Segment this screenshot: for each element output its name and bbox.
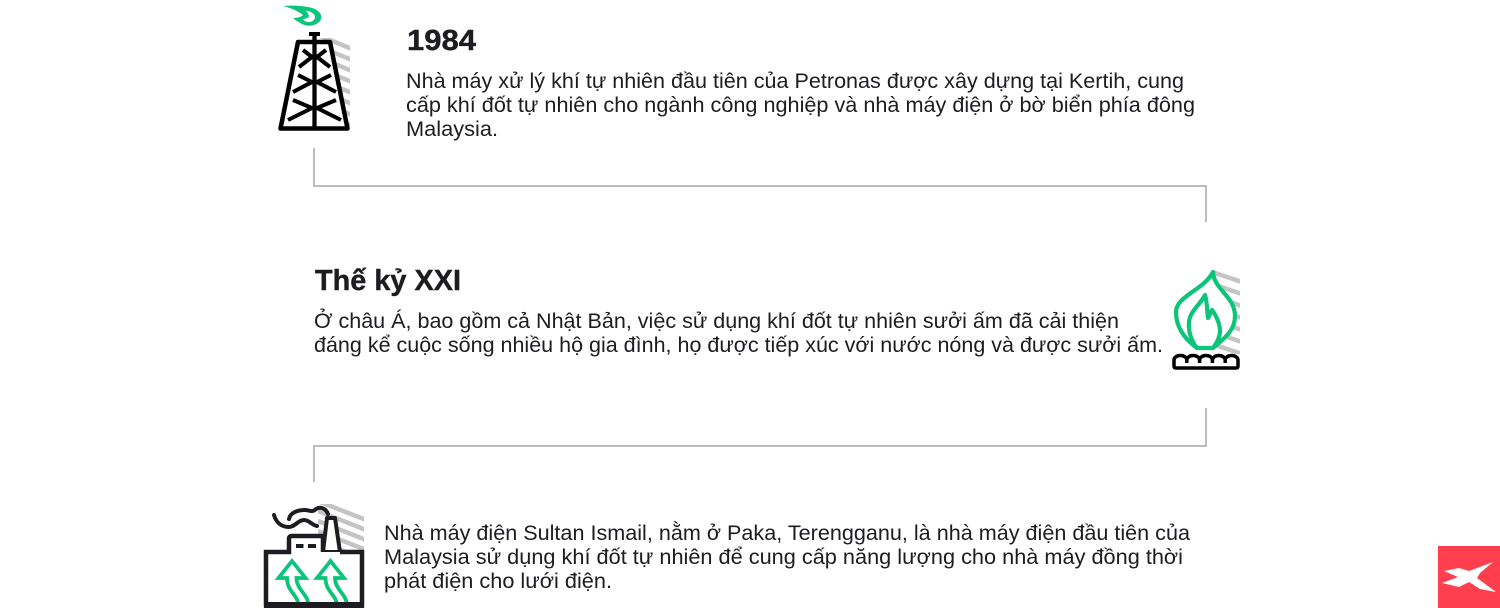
icon: gas derrick with flame <box>280 6 352 129</box>
text block: 1984: Nhà máy xử lý khí tự nhiên đầu tiên của Petronas được xây dựng tại Kertih, cung <box>406 70 1184 93</box>
logo: red square with white X <box>1438 546 1500 608</box>
text block: power plant <box>384 522 1190 593</box>
text block: 21st century: Ở châu Á, bao gồm cả Nhật Bản, việc sử dụng khí đốt tự nhiên sưởi ấm đã cải thiện <box>314 309 1119 333</box>
text block: power plant: Malaysia sử dụng khí đốt tự nhiên để cung cấp năng lượng cho nhà máy đồng thời <box>384 546 1183 569</box>
text block: power plant: phát điện cho lưới điện. <box>384 570 612 593</box>
connector: 1984 to 21st century <box>314 148 1206 222</box>
text block: 1984: Malaysia. <box>406 118 498 141</box>
icon: power plant factory <box>264 498 366 606</box>
heading: 21st century: Thế kỷ XXI <box>315 265 461 297</box>
text block: 1984: cấp khí đốt tự nhiên cho ngành công nghiệp và nhà máy điện ở bờ biển phía đông <box>406 94 1195 117</box>
text block: 21st century: đáng kể cuộc sống nhiều hộ gia đình, họ được tiếp xúc với nước nóng và được sưởi ấm. <box>314 334 1163 357</box>
text block: 21st century <box>314 309 1163 357</box>
icon: gas burner flame <box>1174 268 1242 368</box>
heading: 1984: 1984 <box>407 25 476 57</box>
text block: power plant: Nhà máy điện Sultan Ismail, nằm ở Paka, Terengganu, là nhà máy điện đầu tiên của <box>384 522 1190 545</box>
text block: 1984 <box>406 70 1195 141</box>
connector: 21st century to power plant <box>314 408 1206 482</box>
